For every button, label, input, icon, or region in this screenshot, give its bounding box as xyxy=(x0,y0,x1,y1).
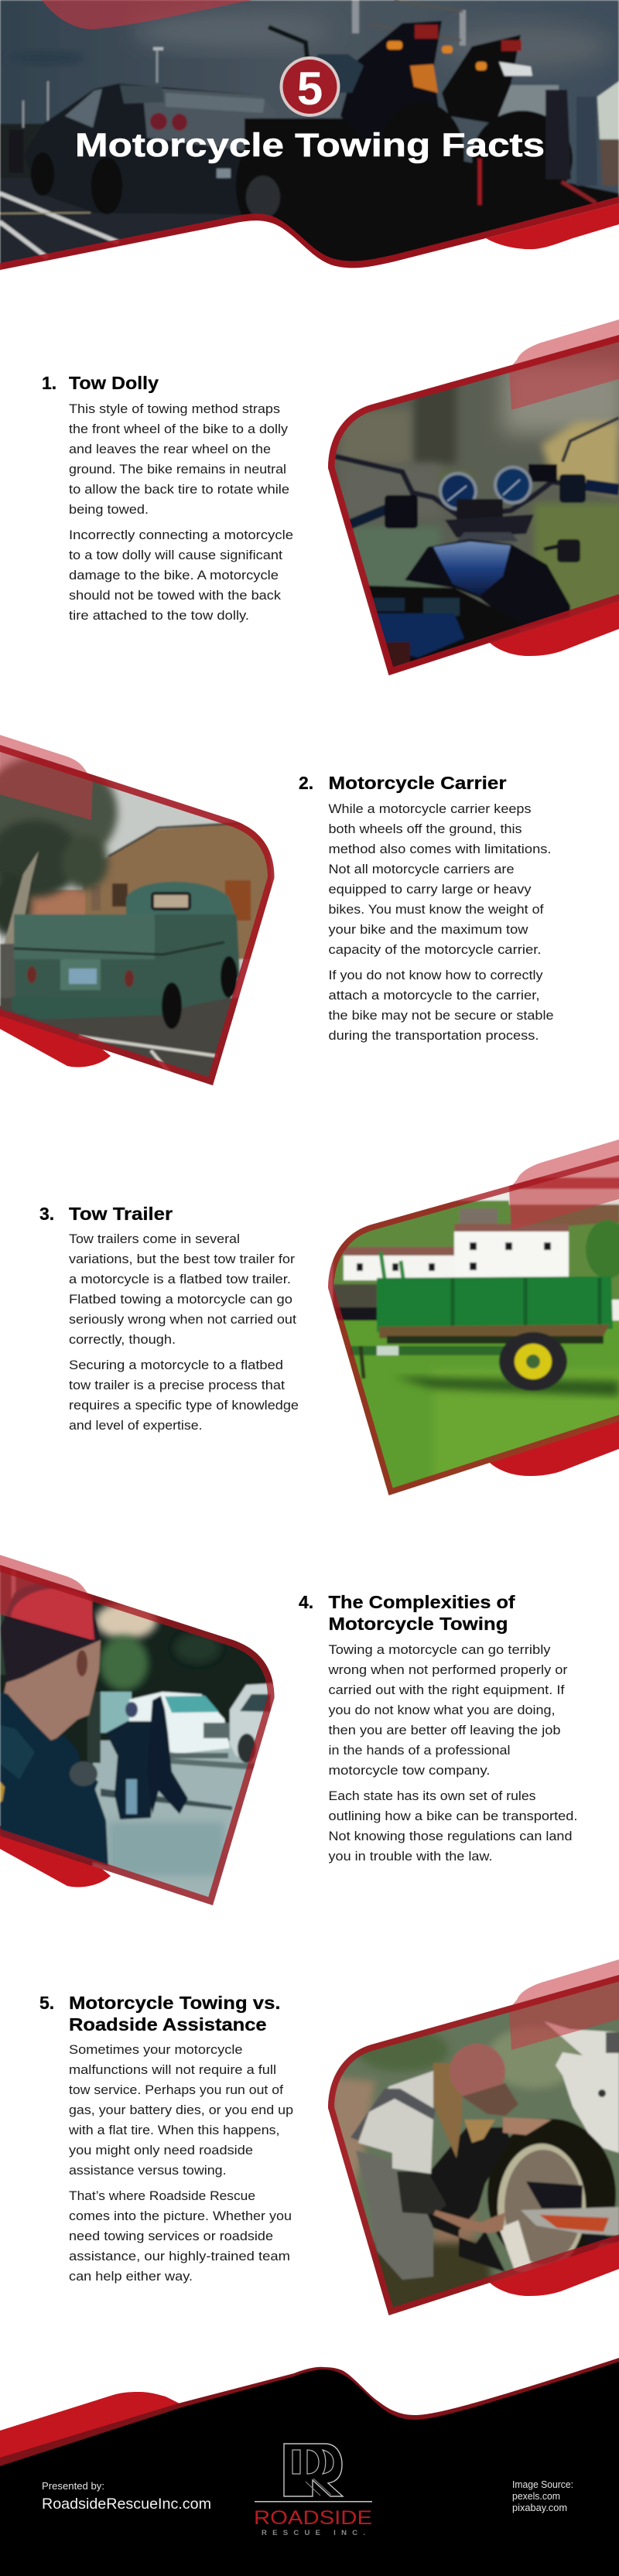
body text: in the hands of a professional xyxy=(328,1744,511,1758)
body text: method also comes with limitations. xyxy=(328,842,551,856)
heading: Motorcycle Towing vs. xyxy=(69,1993,280,2013)
body text: attach a motorcycle to the carrier, xyxy=(328,989,540,1003)
photo: green trailer on grass xyxy=(325,1149,619,1506)
logo: roadside rescue inc: ROADSIDE xyxy=(254,2507,372,2529)
body text: Each state has its own set of rules xyxy=(328,1789,535,1803)
badge: number 5: 5 xyxy=(297,63,323,114)
body text: you might only need roadside xyxy=(69,2144,253,2157)
body text: motorcycle tow company. xyxy=(328,1764,491,1778)
heading: 4. xyxy=(299,1592,313,1612)
body text: your bike and the maximum tow xyxy=(328,923,528,937)
heading: 3. xyxy=(39,1204,54,1224)
logo: roadside rescue inc xyxy=(254,2444,372,2537)
presented by: RoadsideRescueInc.com xyxy=(42,2496,211,2513)
body text: This style of towing method straps xyxy=(69,402,280,416)
section 4: the complexities of motorcycle towing xyxy=(0,1555,577,1911)
body text: outlining how a bike can be transported. xyxy=(328,1809,577,1823)
body text: with a flat tire. When this happens, xyxy=(68,2123,280,2137)
photo: green pickup truck xyxy=(0,739,279,1091)
body text: variations, but the best tow trailer for xyxy=(69,1252,296,1266)
body text: can help either way. xyxy=(69,2270,193,2284)
photo frame xyxy=(328,326,619,675)
body text xyxy=(69,1232,299,1433)
red shape behind photo xyxy=(0,1826,111,1887)
heading: Motorcycle Carrier xyxy=(328,773,507,793)
image sources: Image Source: xyxy=(512,2479,573,2490)
photo frame xyxy=(0,735,274,1085)
body text: Not knowing those regulations can land xyxy=(328,1830,573,1843)
body text: wrong when not performed properly or xyxy=(327,1663,568,1677)
heading xyxy=(39,1204,173,1224)
translucent top shape xyxy=(509,319,619,410)
body text xyxy=(68,2043,293,2284)
body text: a motorcycle is a flatbed tow trailer. xyxy=(69,1273,291,1286)
red shape behind photo xyxy=(489,596,619,656)
hero banner xyxy=(0,0,619,270)
photo: motorcycle handlebars xyxy=(325,329,619,681)
presented by xyxy=(42,2480,211,2513)
heading: 1. xyxy=(42,373,56,393)
body text xyxy=(328,802,554,1043)
hero translucent top shape xyxy=(42,0,252,29)
image sources: pixabay.com xyxy=(512,2502,567,2513)
heading: Tow Trailer xyxy=(69,1204,173,1224)
badge: number 5 xyxy=(280,56,340,117)
body text: That’s where Roadside Rescue xyxy=(69,2189,255,2203)
hero red shape xyxy=(486,203,619,249)
section 1: tow dolly xyxy=(42,319,619,681)
section 3: tow trailer xyxy=(39,1139,619,1506)
body text: Towing a motorcycle can go terribly xyxy=(328,1643,551,1657)
body text: ground. The bike remains in neutral xyxy=(69,463,286,477)
body text: during the transportation process. xyxy=(328,1029,539,1043)
heading: 5. xyxy=(39,1993,54,2013)
translucent top shape xyxy=(509,1139,619,1230)
footer xyxy=(0,2358,619,2576)
body text: carried out with the right equipment. If xyxy=(328,1683,565,1697)
body text: capacity of the motorcycle carrier. xyxy=(328,943,542,957)
body text: seriously wrong when not carried out xyxy=(69,1313,296,1327)
title: Motorcycle Towing Facts xyxy=(75,127,545,164)
translucent top shape xyxy=(0,735,93,820)
footer red shape xyxy=(0,2392,180,2460)
footer dark red wave band xyxy=(0,2358,619,2576)
section 5: motorcycle towing vs. roadside assistance xyxy=(39,1959,619,2321)
body text: Incorrectly connecting a motorcycle xyxy=(69,528,293,542)
body text: requires a specific type of knowledge xyxy=(69,1399,299,1413)
body text: both wheels off the ground, this xyxy=(328,822,522,836)
photo frame xyxy=(0,1555,274,1905)
body text: Tow trailers come in several xyxy=(69,1232,240,1246)
body text: you do not know what you are doing, xyxy=(328,1703,556,1717)
body text: Not all motorcycle carriers are xyxy=(328,863,514,876)
body text: need towing services or roadside xyxy=(69,2229,273,2243)
heading: Motorcycle Towing xyxy=(328,1614,508,1634)
body text: Flatbed towing a motorcycle can go xyxy=(69,1293,292,1307)
body text: equipped to carry large or heavy xyxy=(328,883,532,897)
footer black background xyxy=(0,2362,619,2576)
body text: While a motorcycle carrier keeps xyxy=(328,802,531,816)
photo frame xyxy=(328,1146,619,1495)
heading: Tow Dolly xyxy=(69,373,159,393)
presented by: Presented by: xyxy=(42,2480,104,2492)
heading: The Complexities of xyxy=(328,1592,515,1612)
body text xyxy=(69,402,293,623)
photo: mechanic repairing a dirt bike wheel xyxy=(325,1969,619,2321)
body text: assistance versus towing. xyxy=(69,2164,227,2178)
heading xyxy=(299,1592,515,1634)
heading xyxy=(39,1993,280,2034)
photo frame xyxy=(328,1966,619,2315)
logo: roadside rescue inc: RESCUE INC. xyxy=(262,2529,365,2537)
body text: malfunctions will not require a full xyxy=(69,2063,276,2077)
body text: Sometimes your motorcycle xyxy=(69,2043,243,2057)
body text: comes into the picture. Whether you xyxy=(69,2209,292,2223)
image sources: pexels.com xyxy=(512,2490,560,2502)
body text: to allow the back tire to rotate while xyxy=(69,483,289,497)
body text: bikes. You must know the weight of xyxy=(328,903,544,917)
body text: gas, your battery dies, or you end up xyxy=(69,2103,293,2117)
section 2: motorcycle carrier xyxy=(0,735,554,1091)
body text xyxy=(327,1643,577,1864)
body text: and leaves the rear wheel on the xyxy=(69,442,271,456)
body text: Securing a motorcycle to a flatbed xyxy=(69,1358,283,1372)
body text: tow service. Perhaps you run out of xyxy=(69,2083,283,2097)
red shape behind photo xyxy=(489,1416,619,1476)
body text: damage to the bike. A motorcycle xyxy=(69,569,279,583)
body text: the front wheel of the bike to a dolly xyxy=(69,422,289,436)
body text: the bike may not be secure or stable xyxy=(328,1009,554,1023)
photo: police officer looking at a scene xyxy=(0,1559,279,1911)
body text: If you do not know how to correctly xyxy=(328,969,543,982)
body text: and level of expertise. xyxy=(69,1419,203,1433)
hero dark red wave band xyxy=(0,196,619,272)
image sources xyxy=(512,2479,573,2513)
hero photo: motorcycles on a trailer beside a car xyxy=(0,0,619,272)
red shape behind photo xyxy=(0,1006,111,1067)
translucent top shape xyxy=(0,1555,93,1640)
body text: tire attached to the tow dolly. xyxy=(69,609,249,623)
heading: Roadside Assistance xyxy=(69,2014,267,2034)
hero white wave xyxy=(0,203,619,309)
heading: 2. xyxy=(299,773,313,793)
body text: to a tow dolly will cause significant xyxy=(69,548,282,562)
body text: being towed. xyxy=(69,503,149,517)
red shape behind photo xyxy=(489,2236,619,2296)
translucent top shape xyxy=(509,1959,619,2050)
body text: should not be towed with the back xyxy=(69,589,282,603)
body text: then you are better off leaving the job xyxy=(328,1724,560,1737)
body text: correctly, though. xyxy=(69,1333,176,1347)
body text: you in trouble with the law. xyxy=(328,1850,492,1864)
body text: assistance, our highly-trained team xyxy=(69,2250,290,2263)
body text: tow trailer is a precise process that xyxy=(69,1379,285,1392)
